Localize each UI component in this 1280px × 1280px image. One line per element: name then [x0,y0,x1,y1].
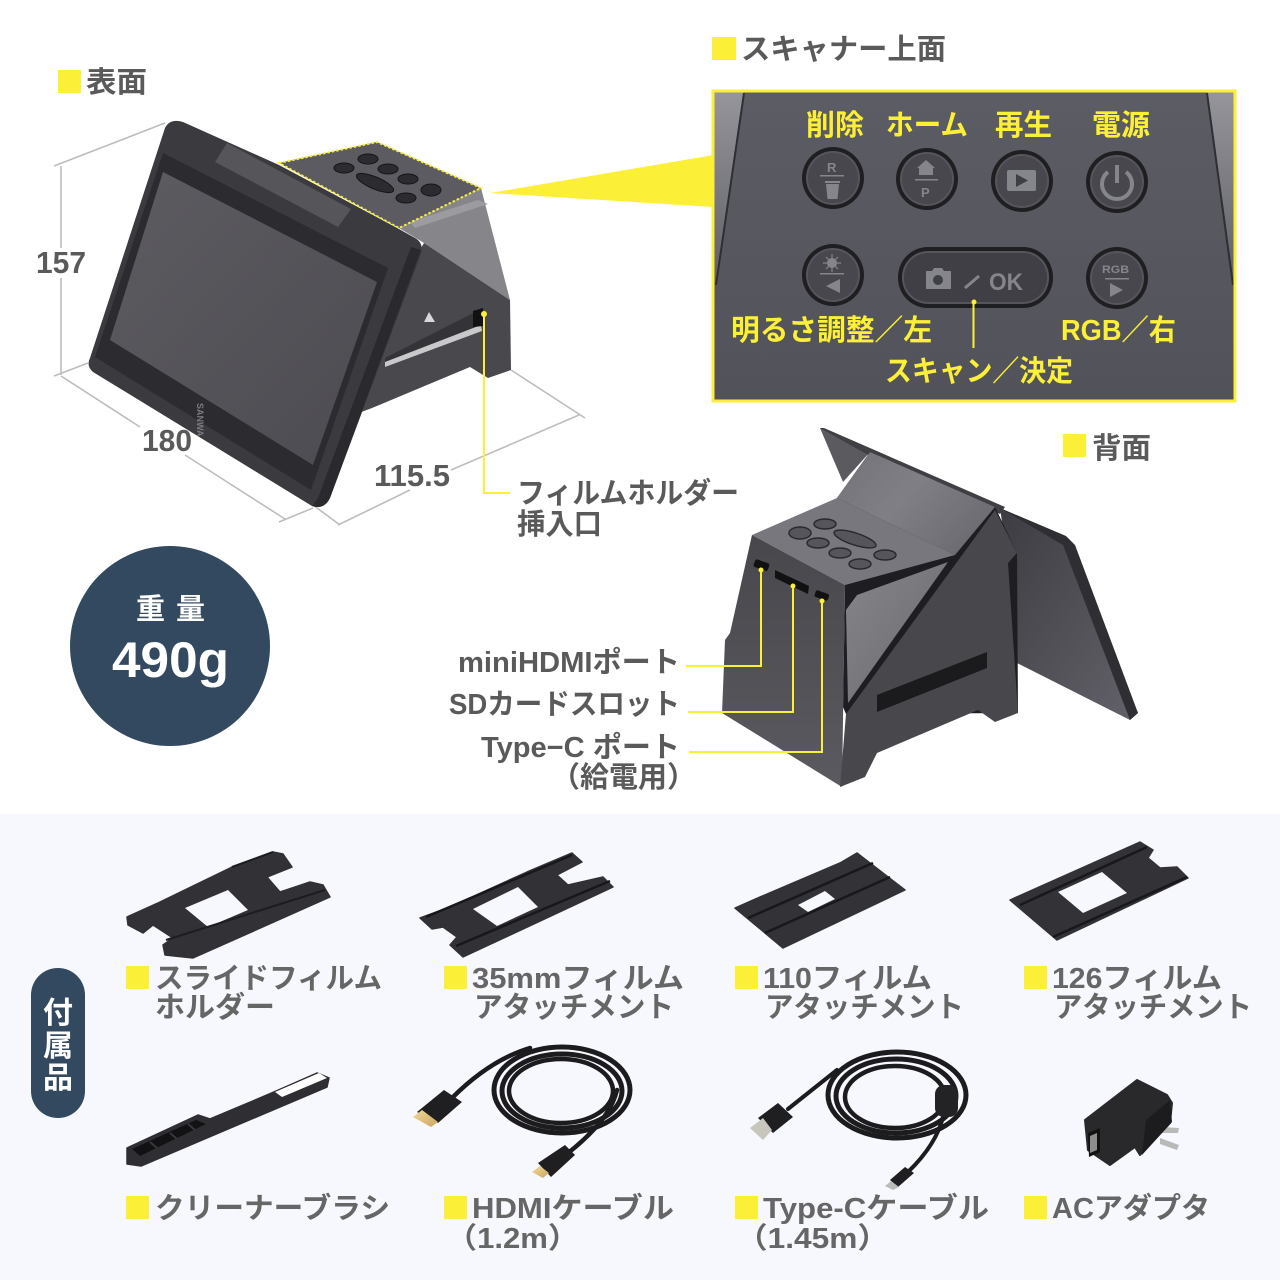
callout line: scan [972,300,976,348]
far display flap [820,428,870,482]
button: play [991,150,1053,212]
label: film holder slot: フィルムホルダー [517,476,739,510]
button: home: P [921,185,930,200]
labels: ports [449,646,696,794]
label: slide film holder: スライドフィルム [155,963,382,995]
item: Type-C cable [750,1052,966,1190]
label: 35mm film attachment: 35mmフィルム [472,963,684,995]
labels: button names: RGB／右 [1061,314,1176,347]
label: 110 film attachment: アタッチメント [765,991,964,1024]
label: slide film holder [126,963,382,1024]
button: scan ok [898,247,1053,308]
labels: ports: Type−C ポート [481,731,680,764]
item: AC adapter [1085,1080,1179,1165]
label: HDMI cable: （1.2m） [446,1223,579,1255]
dimension: height 157: 157 [36,245,86,280]
heading: front view: 表面 [86,66,147,99]
product: scanner front view: SANWA [195,403,205,437]
button: delete [802,147,864,209]
labels: ports: SDカードスロット [449,689,680,721]
label: 110 film attachment [735,963,964,1024]
label: Type-C cable [735,1191,989,1255]
heading: accessories pill: 属 [43,1030,73,1063]
heading: back view [1063,432,1151,465]
callout beam [490,155,714,207]
item: 110 film attachment [735,853,905,948]
labels: button names: 削除 [806,109,864,142]
dark backing [837,452,1018,714]
item: cleaner brush [127,1073,329,1166]
scanner sloped top [399,188,510,300]
button: home [896,148,958,210]
button: rgb right: RGB [1102,264,1129,276]
dimension: depth 115.5: 115.5 [374,458,450,493]
button: power [1086,151,1148,213]
labels: button names: スキャン／決定 [885,355,1073,388]
right side body [840,510,1018,787]
panel: button close-up [713,91,1235,401]
scanner side body [340,243,511,420]
labels: button names: ホーム [886,110,968,142]
product: scanner front view [89,121,511,507]
label: HDMI cable [444,1191,674,1255]
label: film holder slot [517,476,739,541]
product: scanner back view [722,428,1138,787]
badge: weight [70,546,270,746]
label: Type-C cable: Type-Cケーブル [763,1191,989,1225]
label: 35mm film attachment [444,963,684,1024]
badge: weight: 重 量 [136,593,205,626]
label: cleaner brush: クリーナーブラシ [155,1191,390,1225]
labels: ports: （給電用） [551,761,696,794]
metal triangle [846,562,948,703]
labels: button names: 明るさ調整／左 [731,314,932,347]
labels: ports: miniHDMIポート [458,646,680,679]
display back panel [1000,508,1138,720]
label: 110 film attachment: 110フィルム [763,963,932,995]
heading: accessories pill [31,968,85,1118]
screen [110,172,377,465]
label: slide film holder: ホルダー [155,990,275,1024]
item: HDMI cable [413,1047,630,1178]
label: film holder slot: 挿入口 [517,508,602,541]
heading: accessories pill: 品 [43,1062,73,1095]
item: 126 film attachment [1010,842,1188,940]
sloped metal top [837,452,995,555]
label: HDMI cable: HDMIケーブル [472,1191,674,1225]
callout line: film holder [481,311,510,493]
button: delete: R [827,160,837,175]
dimension: width 180: 180 [142,423,192,458]
labels: button names: 電源 [1092,109,1150,142]
port face [722,535,845,787]
label: Type-C cable: （1.45m） [736,1223,889,1255]
labels: button names: 再生 [995,109,1052,142]
label: AC adapter: ACアダプタ [1052,1191,1210,1225]
button: brightness left [802,244,864,306]
label: 126 film attachment: 126フィルム [1052,963,1222,995]
screen housing [89,121,422,507]
heading: accessories pill: 付 [43,997,73,1030]
item: slide film holder [127,852,330,958]
scanner top panel [279,142,481,228]
dimension lines [54,123,585,525]
heading: back view: 背面 [1092,432,1151,465]
button: scan ok: OK [989,269,1024,296]
heading: scanner top: スキャナー上面 [741,33,946,66]
label: 35mm film attachment: アタッチメント [474,991,674,1024]
panel: accessories background [0,814,1280,1280]
labels: button names [731,109,1176,388]
heading: front view [58,66,147,99]
button: rgb right [1086,247,1148,309]
callout lines: ports [686,568,824,752]
top button panel [752,498,955,585]
label: 126 film attachment: アタッチメント [1054,991,1252,1024]
badge: weight: 490g [112,632,229,688]
item: 35mm film attachment [420,853,613,957]
label: 126 film attachment [1024,963,1252,1024]
